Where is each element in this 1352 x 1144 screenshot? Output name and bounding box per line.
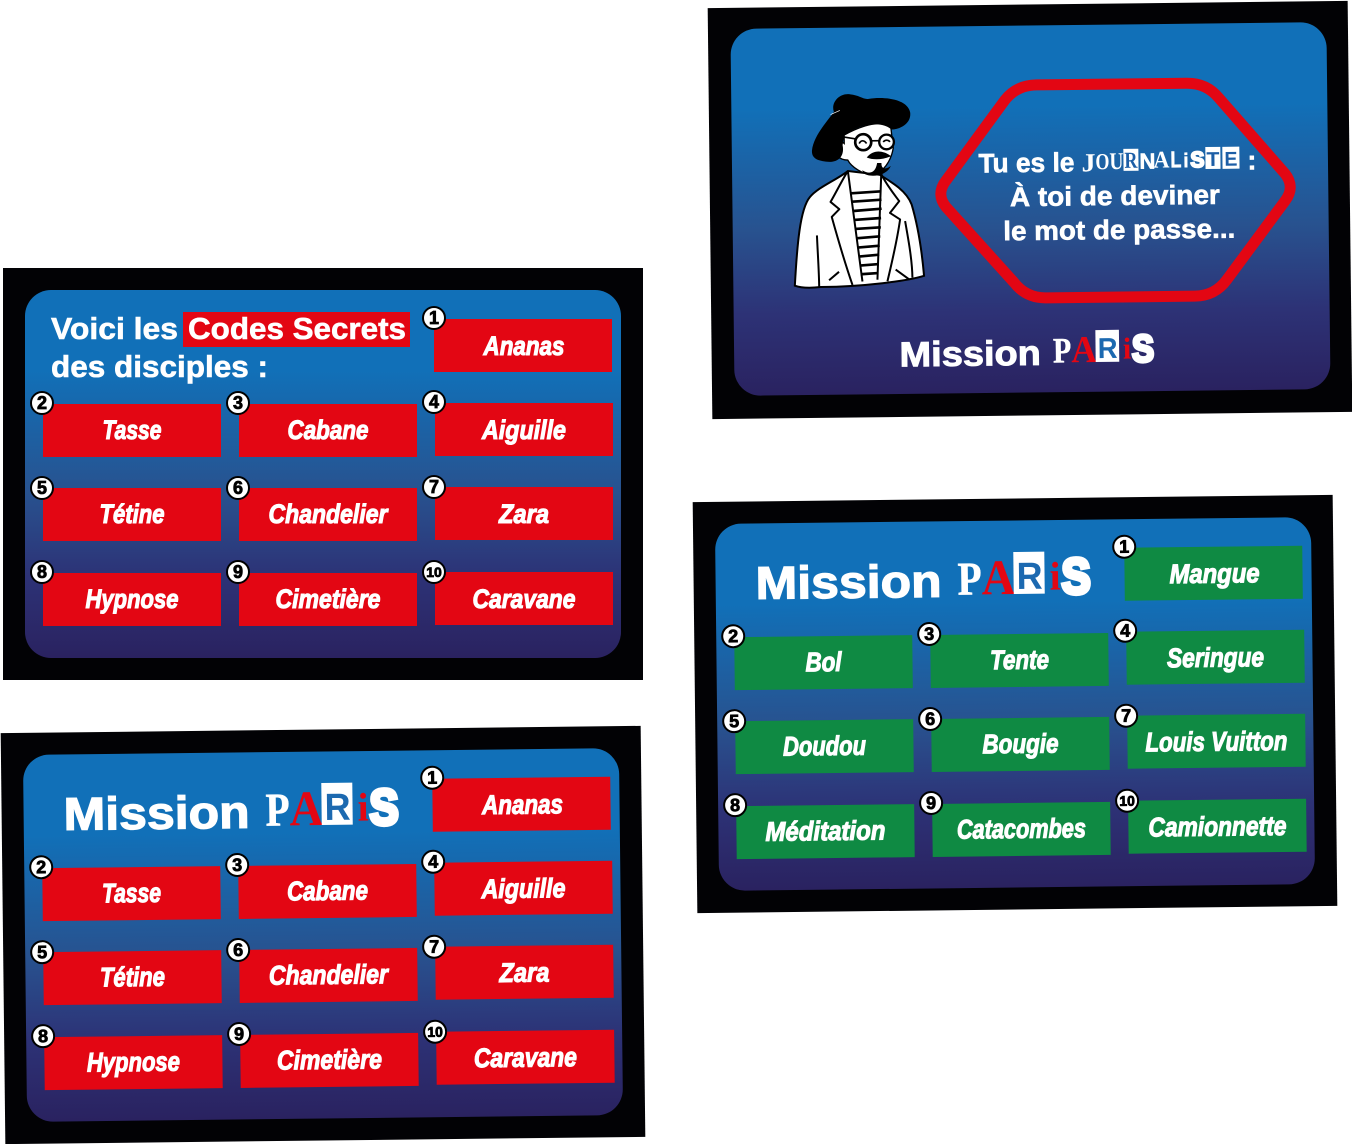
- card panel: [730, 22, 1331, 396]
- logo: Mission Paris: R: [1016, 556, 1043, 598]
- code 4: Aiguille: [481, 415, 566, 445]
- code 10: Caravane: [472, 584, 576, 614]
- code 7: Zara: [498, 957, 550, 988]
- code 4: 4: [429, 392, 439, 412]
- code 5: [31, 477, 221, 541]
- code 3: 3: [233, 393, 243, 413]
- code 2: 2: [36, 857, 46, 877]
- code 10: 10: [427, 1024, 443, 1040]
- code 9: 9: [233, 562, 243, 582]
- card: journalist role: [708, 1, 1352, 419]
- code 5: Tétine: [100, 499, 164, 529]
- code 9: Catacombes: [957, 813, 1086, 845]
- code 3: [226, 852, 417, 919]
- code 8: [32, 1023, 223, 1090]
- code 9: 9: [926, 793, 936, 813]
- code 1: 1: [429, 308, 439, 328]
- logo: Mission Paris: Mission: [63, 786, 250, 840]
- code 10: 10: [426, 564, 442, 580]
- code 5: Doudou: [783, 731, 867, 762]
- code 1: Mangue: [1169, 558, 1260, 589]
- code 2: [30, 854, 221, 921]
- code 7: [423, 476, 613, 540]
- code 8: 8: [730, 795, 740, 815]
- code 5: 5: [729, 711, 739, 731]
- code 7: 7: [429, 937, 439, 957]
- logo: Mission Paris: i: [1123, 332, 1131, 366]
- code 5: [723, 708, 914, 774]
- card: green codes with logo: [693, 495, 1337, 913]
- callout text: role line: [978, 145, 1257, 179]
- code 1: 1: [427, 768, 437, 788]
- code 6: 6: [925, 709, 935, 729]
- code 4: [423, 391, 613, 456]
- logo: Mission Paris: S: [1061, 548, 1091, 604]
- code 10: Caravane: [474, 1042, 577, 1073]
- code 8: Hypnose: [86, 584, 178, 614]
- code 6: Bougie: [982, 729, 1059, 759]
- logo: Mission Paris: Mission: [899, 334, 1041, 374]
- logo: Mission Paris: S: [369, 779, 399, 835]
- logo: Mission Paris: [755, 548, 1091, 609]
- logo: Mission Paris: R: [1098, 333, 1118, 365]
- code 7: [1115, 703, 1306, 769]
- code 2: 2: [728, 626, 738, 646]
- callout text: role line: J: [1081, 148, 1096, 177]
- card frame: [693, 495, 1337, 913]
- code 9: [227, 561, 417, 626]
- callout text: role line: E: [1224, 149, 1238, 171]
- code 7: Louis Vuitton: [1145, 726, 1288, 758]
- code 1: Ananas: [483, 331, 564, 361]
- code 1: [1113, 534, 1303, 601]
- code 6: [227, 477, 417, 541]
- card frame: [1, 726, 645, 1144]
- logo: Mission Paris: A: [1071, 329, 1098, 371]
- heading: Codes Secrets: [188, 311, 406, 346]
- code 1: [423, 307, 612, 372]
- code 6: 6: [233, 478, 243, 498]
- logo: Mission Paris: Mission: [755, 555, 942, 609]
- callout text: role line: R: [1124, 148, 1138, 173]
- code 10: [424, 1019, 615, 1085]
- code 4: Seringue: [1167, 642, 1264, 673]
- code 9: 9: [234, 1024, 244, 1044]
- card panel: [23, 748, 623, 1122]
- code 10: 10: [1119, 793, 1135, 809]
- code 3: [227, 392, 417, 457]
- logo: Mission Paris: P: [1053, 330, 1071, 370]
- code 9: [228, 1021, 419, 1088]
- code 2: [722, 623, 913, 690]
- logo: Mission Paris: A: [981, 549, 1016, 605]
- code 8: 8: [37, 562, 47, 582]
- hexagon callout: [940, 82, 1291, 299]
- code 5: Tétine: [100, 962, 165, 993]
- code 1: [421, 765, 611, 832]
- logo: Mission Paris: [63, 779, 399, 840]
- code 6: [919, 706, 1110, 772]
- code 7: Zara: [498, 499, 549, 529]
- code 2: [31, 392, 221, 457]
- callout text: role line: L: [1170, 146, 1182, 172]
- code 9: Cimetière: [277, 1044, 382, 1076]
- code 7: [423, 934, 614, 1000]
- code 4: Aiguille: [480, 873, 566, 904]
- callout text: role line: A: [1153, 147, 1170, 174]
- logo: Mission Paris: R: [324, 787, 351, 829]
- card frame: [708, 1, 1352, 419]
- code 4: [422, 849, 613, 916]
- code 3: Tente: [990, 645, 1049, 675]
- logo: Mission Paris: P: [265, 784, 290, 837]
- logo: Mission Paris: A: [289, 780, 324, 836]
- logo: Mission Paris: i: [357, 784, 369, 830]
- logo: Mission Paris: S: [1132, 328, 1154, 371]
- callout text: role line: U: [1109, 149, 1124, 175]
- code 3: 3: [924, 624, 934, 644]
- code 3: 3: [232, 855, 242, 875]
- code 5: [31, 939, 222, 1005]
- code 6: Chandelier: [268, 499, 389, 529]
- icon: journalist illustration: [793, 93, 924, 288]
- code 7: 7: [429, 477, 439, 497]
- card panel: [25, 290, 621, 658]
- callout text: line 3: le mot de passe...: [1003, 214, 1235, 246]
- code 10: Camionnette: [1148, 811, 1287, 842]
- heading: des disciples :: [51, 349, 268, 384]
- code 2: Bol: [805, 647, 842, 677]
- callout text: role line: T: [1206, 149, 1220, 171]
- code 8: 8: [38, 1026, 48, 1046]
- code 4: 4: [428, 852, 438, 872]
- code 4: 4: [1120, 621, 1130, 641]
- card: red codes with logo: [1, 726, 645, 1144]
- logo: Mission Paris: i: [1049, 553, 1061, 599]
- code 10: [423, 561, 613, 625]
- callout text: role line: S: [1190, 147, 1205, 172]
- code 3: [918, 621, 1109, 688]
- code 2: Tasse: [102, 878, 161, 909]
- code 6: Chandelier: [269, 959, 389, 991]
- callout text: role line: i: [1183, 150, 1189, 172]
- callout text: role line: :: [1247, 145, 1257, 176]
- card frame: [3, 268, 643, 680]
- logo: Mission Paris: P: [957, 553, 982, 606]
- heading: [51, 311, 410, 384]
- code 8: Hypnose: [87, 1047, 180, 1078]
- callout text: role line: O: [1095, 149, 1110, 174]
- code 3: Cabane: [287, 875, 368, 906]
- code 5: 5: [37, 942, 47, 962]
- code 8: Méditation: [765, 815, 886, 847]
- code 1: Ananas: [481, 789, 563, 820]
- code 1: 1: [1119, 537, 1129, 557]
- heading: Voici les: [51, 311, 178, 346]
- code 9: Cimetière: [276, 584, 380, 614]
- code 6: [227, 937, 418, 1003]
- code 4: [1114, 618, 1305, 685]
- code 9: [920, 790, 1111, 857]
- code 3: Cabane: [288, 415, 368, 445]
- code 5: 5: [37, 478, 47, 498]
- callout text: role line: N: [1139, 149, 1156, 174]
- callout text: role line: Tu es le: [978, 147, 1075, 179]
- code 7: 7: [1121, 706, 1131, 726]
- logo: Mission Paris: [899, 328, 1154, 374]
- code 10: [1116, 788, 1307, 854]
- code 8: [724, 792, 915, 859]
- card: secret codes with heading: [3, 268, 643, 680]
- code 6: 6: [233, 940, 243, 960]
- code 2: 2: [37, 393, 47, 413]
- card panel: [715, 517, 1315, 891]
- code 8: [31, 561, 221, 626]
- code 2: Tasse: [102, 415, 162, 445]
- callout text: line 2: À toi de deviner: [1010, 179, 1221, 212]
